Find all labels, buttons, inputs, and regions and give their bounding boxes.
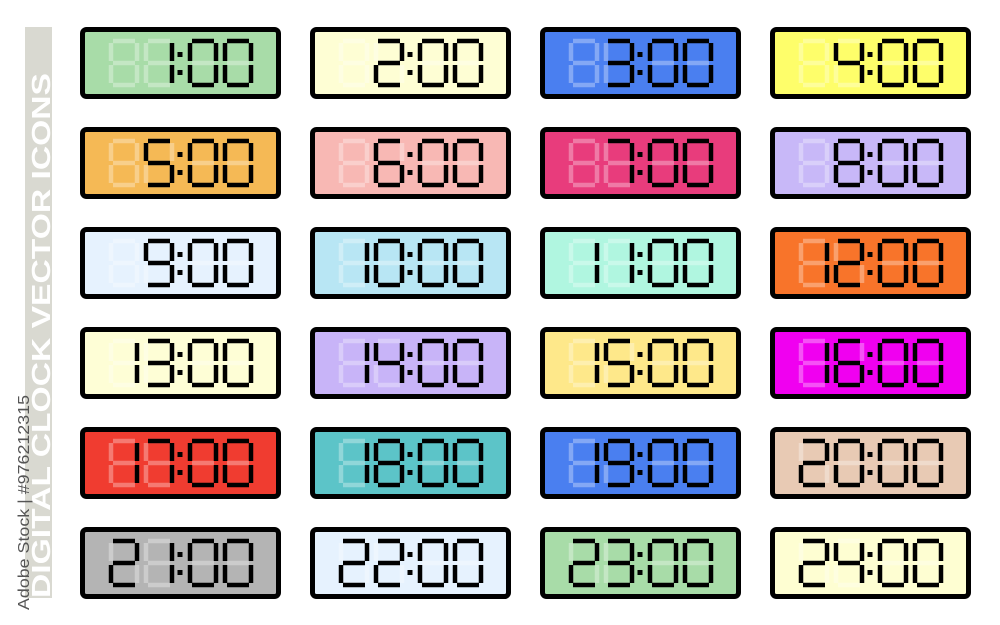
- clock 19:00: [542, 430, 738, 496]
- clock 3:00: [542, 30, 738, 96]
- watermark id: Adobe Stock | #976212315: [16, 395, 33, 610]
- clock 22:00: [312, 530, 508, 596]
- clock 3:00: 3:00: [640, 66, 642, 68]
- clock 8:00: [772, 130, 968, 196]
- clock 5:00: [82, 130, 278, 196]
- title: vertical: DIGITAL CLOCK VECTOR ICONS: [26, 73, 56, 598]
- side strip: [25, 27, 56, 598]
- clock 16:00: 16:00: [870, 366, 873, 368]
- clock 20:00: 20:00: [870, 466, 873, 468]
- clock 21:00: 21:00: [180, 566, 183, 568]
- clock 2:00: [312, 30, 508, 96]
- clock 15:00: [542, 330, 738, 396]
- clock 11:00: [542, 230, 738, 296]
- clock 2:00: 2:00: [410, 66, 412, 68]
- clock 5:00: 5:00: [180, 166, 182, 168]
- clock 7:00: [542, 130, 738, 196]
- clock 4:00: 4:00: [870, 66, 872, 68]
- clock 6:00: [312, 130, 508, 196]
- clock 15:00: 15:00: [640, 366, 643, 368]
- clock 9:00: 9:00: [180, 266, 182, 268]
- clock 10:00: [312, 230, 508, 296]
- clock 14:00: [312, 330, 508, 396]
- clock 10:00: 10:00: [410, 266, 413, 268]
- clock 16:00: [772, 330, 968, 396]
- clock 23:00: 23:00: [640, 566, 643, 568]
- clock 1:00: [82, 30, 278, 96]
- clock 24:00: 24:00: [870, 566, 873, 568]
- clock 14:00: 14:00: [410, 366, 413, 368]
- clock 12:00: 12:00: [870, 266, 873, 268]
- clock 12:00: [772, 230, 968, 296]
- clock 23:00: [542, 530, 738, 596]
- clock 22:00: 22:00: [410, 566, 413, 568]
- clock 4:00: [772, 30, 968, 96]
- clock 24:00: [772, 530, 968, 596]
- clock 13:00: [82, 330, 278, 396]
- clock 9:00: [82, 230, 278, 296]
- clock 8:00: 8:00: [870, 166, 872, 168]
- clock 11:00: 11:00: [640, 266, 643, 268]
- clock 21:00: [82, 530, 278, 596]
- clock 6:00: 6:00: [410, 166, 412, 168]
- clock 19:00: 19:00: [640, 466, 643, 468]
- clock 18:00: 18:00: [410, 466, 413, 468]
- clock 18:00: [312, 430, 508, 496]
- clock 17:00: 17:00: [180, 466, 183, 468]
- clock 1:00: 1:00: [180, 66, 182, 68]
- clock 7:00: 7:00: [640, 166, 642, 168]
- clock 20:00: [772, 430, 968, 496]
- clock 13:00: 13:00: [180, 366, 183, 368]
- clock 17:00: [82, 430, 278, 496]
